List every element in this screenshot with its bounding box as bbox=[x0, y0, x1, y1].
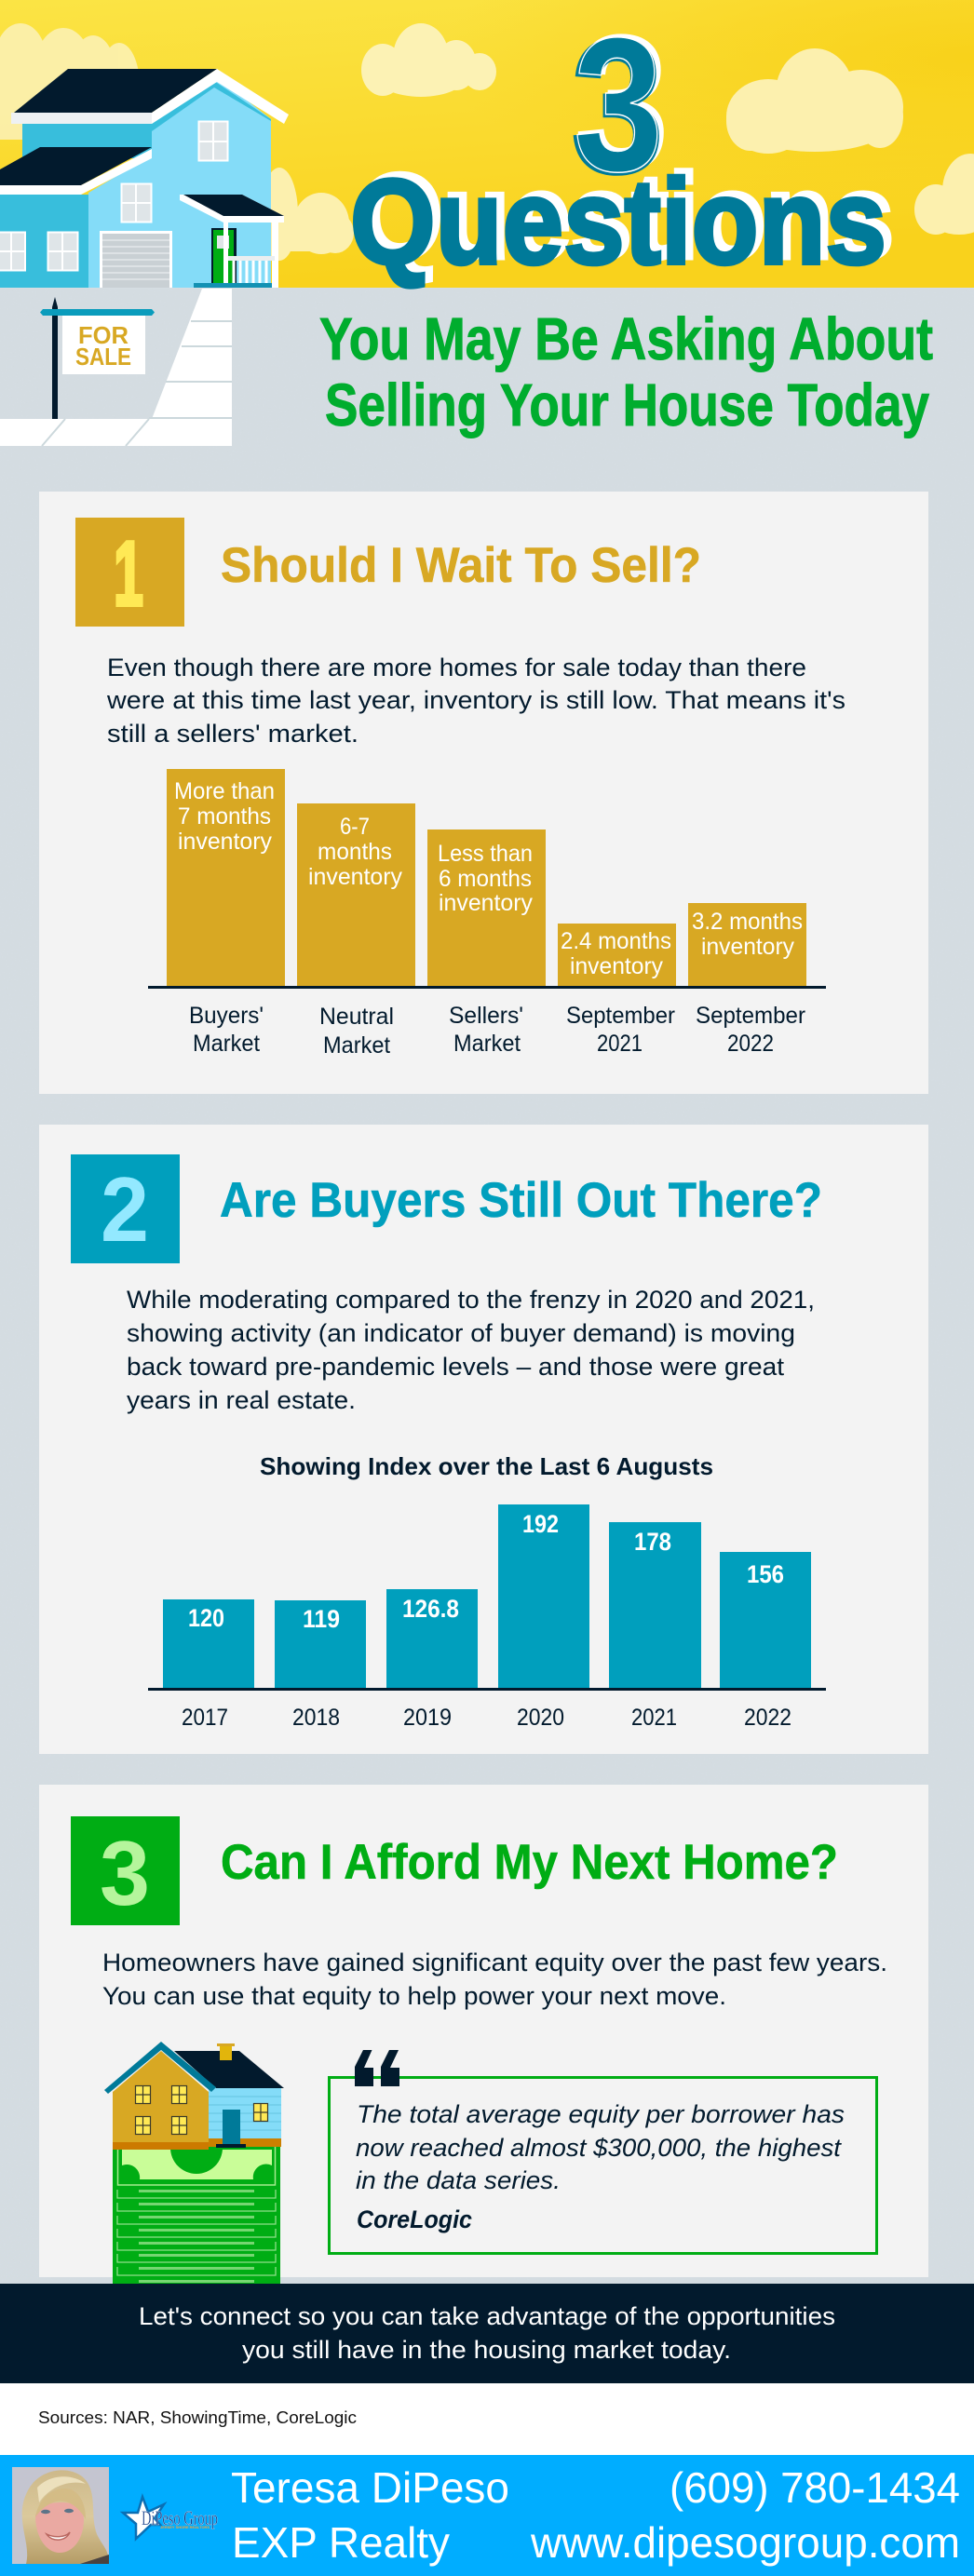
axis labels: 2018 bbox=[292, 1705, 340, 1731]
body text 2: back toward pre-pandemic levels – and those were great bbox=[127, 1353, 785, 1381]
bar: September 2021: 2.4 months bbox=[561, 928, 671, 954]
heading 1: Should I Wait To Sell? bbox=[221, 538, 701, 593]
body text 2: showing activity (an indicator of buyer demand) is moving bbox=[127, 1319, 795, 1347]
axis labels bbox=[182, 1705, 791, 1731]
title: Questions: Questions bbox=[350, 154, 886, 290]
cloud: far right bbox=[914, 154, 974, 235]
bar: 2022 bbox=[720, 1552, 811, 1689]
heading 3: Can I Afford My Next Home? bbox=[221, 1835, 838, 1890]
bar: neutral market bbox=[297, 803, 415, 986]
axis labels: September bbox=[566, 1003, 675, 1029]
bar: 2017: 120 bbox=[188, 1604, 224, 1632]
number badge 3: 3 bbox=[100, 1822, 150, 1924]
quote attribution: CoreLogic bbox=[357, 2205, 472, 2233]
axis labels: September bbox=[696, 1003, 805, 1029]
title: 3: 3 bbox=[575, 0, 669, 209]
body text 3: Homeowners have gained significant equity over the past few years. bbox=[102, 1949, 887, 1976]
bar: sellers market: 6 months bbox=[439, 866, 532, 892]
small house bbox=[104, 2042, 284, 2150]
axis labels: Sellers' bbox=[449, 1003, 523, 1029]
bar: sellers market bbox=[427, 829, 546, 986]
bar: September 2022 bbox=[688, 903, 806, 986]
logo: DiPeso Group: DiPeso Group bbox=[142, 2506, 218, 2529]
logo: DiPeso Group: JERSEY SHORE REALTORS bbox=[160, 2525, 210, 2529]
bar: sellers market: Less than bbox=[438, 841, 533, 867]
panel: question 3 bbox=[39, 1785, 928, 2277]
quote text: now reached almost $300,000, the highest bbox=[356, 2134, 843, 2162]
porch bbox=[180, 195, 284, 288]
bar: sellers market: inventory bbox=[439, 890, 533, 916]
bar: September 2022: inventory bbox=[701, 934, 794, 960]
front walkway and sidewalk bbox=[0, 289, 232, 446]
axis labels: Market bbox=[323, 1032, 390, 1059]
money stack bbox=[113, 2122, 280, 2284]
windows bbox=[0, 121, 227, 270]
call to action band bbox=[0, 2284, 974, 2383]
body text 2: While moderating compared to the frenzy in 2020 and 2021, bbox=[127, 1286, 815, 1314]
bar: 2021: 178 bbox=[634, 1528, 671, 1556]
sources strip bbox=[0, 2383, 974, 2455]
bar chart: months of inventory bbox=[148, 769, 826, 1059]
axis labels: 2020 bbox=[517, 1705, 564, 1731]
panel: question 1 bbox=[39, 492, 928, 1094]
bar: neutral market: months bbox=[318, 839, 392, 865]
call to action band: Let's connect so you can take advantage of the opportunities bbox=[139, 2302, 835, 2330]
body text 1: were at this time last year, inventory is still low. That means it's bbox=[106, 686, 845, 714]
bar: September 2021: inventory bbox=[570, 953, 663, 979]
cloud: top centre bbox=[361, 23, 496, 97]
body text 1: Even though there are more homes for sale today than there bbox=[107, 654, 806, 681]
bar: 2019 bbox=[386, 1589, 478, 1689]
axis labels: 2017 bbox=[182, 1705, 228, 1731]
agent contact footer bbox=[0, 2455, 974, 2576]
title: Questions: Questions bbox=[358, 148, 894, 284]
axis labels: 2019 bbox=[403, 1705, 452, 1731]
brokerage: EXP Realty bbox=[232, 2518, 450, 2567]
sources strip: Sources: NAR, ShowingTime, CoreLogic bbox=[38, 2408, 357, 2427]
heading 2: Are Buyers Still Out There? bbox=[220, 1173, 822, 1228]
garage door bbox=[100, 231, 172, 288]
bar: 2017 bbox=[163, 1599, 254, 1689]
logo: DiPeso Group bbox=[123, 2497, 218, 2539]
subtitle bbox=[319, 305, 933, 438]
front door bbox=[211, 228, 237, 284]
bar: buyers market bbox=[167, 769, 285, 986]
bar: buyers market: 7 months bbox=[178, 803, 271, 829]
bar: 2018: 119 bbox=[303, 1605, 340, 1633]
bar: 2021 bbox=[609, 1522, 701, 1689]
quote box bbox=[330, 2050, 877, 2253]
body text 1 bbox=[106, 654, 845, 748]
body text 2: years in real estate. bbox=[127, 1386, 356, 1414]
cloud: right bbox=[726, 48, 903, 154]
number badge 3 bbox=[71, 1816, 180, 1925]
axis labels: Neutral bbox=[319, 1004, 394, 1030]
axis labels: 2022 bbox=[727, 1031, 774, 1057]
axis labels bbox=[189, 1003, 805, 1059]
bar: 2022: 156 bbox=[747, 1560, 784, 1588]
axis labels: Market bbox=[453, 1031, 521, 1057]
agent name: Teresa DiPeso bbox=[231, 2463, 509, 2512]
website: www.dipesogroup.com bbox=[530, 2518, 960, 2567]
cloud: top left bbox=[0, 23, 140, 140]
number badge 1: 1 bbox=[114, 522, 143, 625]
quote text: The total average equity per borrower has bbox=[357, 2100, 845, 2128]
body text 2 bbox=[127, 1286, 815, 1414]
bar: 2020 bbox=[498, 1504, 589, 1689]
icon: for sale sign: FOR bbox=[78, 321, 129, 349]
icon: for sale sign: SALE bbox=[75, 343, 131, 371]
axis labels: Buyers' bbox=[189, 1003, 264, 1029]
cloud: behind house bbox=[261, 168, 354, 261]
agent photo bbox=[12, 2467, 109, 2564]
panel: question 2 bbox=[39, 1125, 928, 1754]
bar chart: showing index bbox=[148, 1504, 826, 1731]
body text 3 bbox=[102, 1949, 887, 2010]
title: 3: 3 bbox=[571, 0, 664, 213]
bar: 2020: 192 bbox=[522, 1510, 559, 1538]
bar: 2018 bbox=[275, 1600, 366, 1689]
icon: blue house bbox=[0, 69, 289, 288]
axis labels: 2021 bbox=[631, 1705, 677, 1731]
bar: neutral market: inventory bbox=[308, 864, 402, 890]
title: 3: 3 bbox=[574, 0, 663, 211]
bar: 2019: 126.8 bbox=[402, 1595, 459, 1623]
icon: house on stack of money bbox=[104, 2042, 284, 2284]
quote text bbox=[356, 2100, 845, 2194]
bar: September 2022: 3.2 months bbox=[692, 909, 803, 935]
bar: buyers market: More than bbox=[174, 778, 275, 804]
axis labels: 2021 bbox=[597, 1031, 643, 1057]
number badge 2: 2 bbox=[101, 1158, 149, 1261]
axis labels: Market bbox=[193, 1031, 260, 1057]
bar: September 2021 bbox=[558, 924, 676, 986]
header: yellow sky bbox=[0, 0, 974, 288]
body text 3: You can use that equity to help power your next move. bbox=[102, 1982, 726, 2010]
quote text: in the data series. bbox=[356, 2166, 561, 2194]
icon: quotation mark bbox=[355, 2050, 399, 2086]
bar: buyers market: inventory bbox=[178, 829, 272, 855]
phone: (609) 780-1434 bbox=[670, 2463, 960, 2512]
body text 1: still a sellers' market. bbox=[107, 720, 358, 748]
call to action band: you still have in the housing market today. bbox=[242, 2336, 731, 2364]
axis labels: 2022 bbox=[744, 1705, 791, 1731]
icon: for sale sign bbox=[40, 297, 155, 419]
bar: neutral market: 6-7 bbox=[340, 814, 370, 840]
number badge 1 bbox=[75, 518, 184, 627]
chart title: Showing Index over the Last 6 Augusts bbox=[260, 1452, 713, 1480]
number badge 2 bbox=[71, 1154, 180, 1263]
